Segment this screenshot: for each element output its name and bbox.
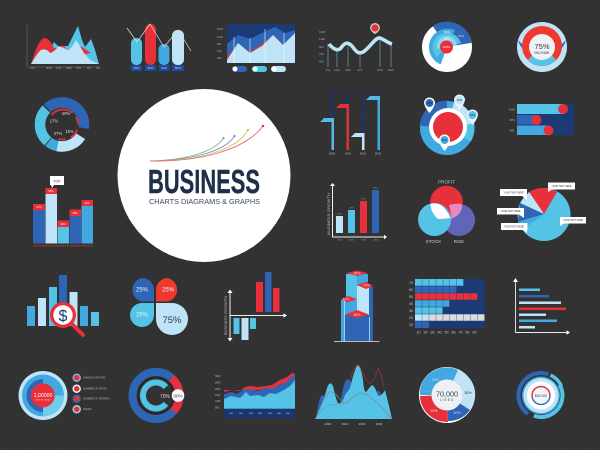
chart: concentric ring dial: $50,000	[535, 394, 547, 398]
chart: 3D stepped columns: 90%	[353, 272, 361, 276]
chart: bars with TOP callout: 95%	[48, 190, 54, 193]
chart: heatmap grid: 40	[409, 302, 413, 306]
chart: layered area chart: TUE	[56, 67, 61, 70]
chart: wavy line chart: OCT	[357, 68, 363, 72]
chart: horizontal bars by country: IND	[509, 128, 515, 132]
chart: visitors donut with legend	[18, 371, 110, 420]
chart: heatmap grid: 30	[430, 330, 434, 334]
chart: 70/30 donut: 30%	[173, 394, 184, 400]
chart: horizontal bars by country: JPN	[509, 118, 515, 122]
chart: business growth bars: 30%	[337, 214, 342, 216]
chart: layered area chart: THU	[76, 67, 81, 70]
chart: stacked area chart with footer: 2005	[268, 413, 273, 415]
chart: stacked area chart with footer: 2007	[286, 413, 291, 415]
chart: pie with callouts	[497, 182, 586, 241]
chart: heatmap grid: 60	[452, 330, 456, 334]
chart: heatmap grid: 70	[409, 281, 413, 285]
chart: mountain area chart: 2030	[376, 422, 383, 426]
chart: rounded bars with line: 40%	[133, 66, 140, 70]
chart: business growth bars: 2013	[361, 240, 367, 242]
chart: radial stepped pie: 75%	[443, 37, 450, 41]
chart: flag bars: 2020	[360, 152, 367, 156]
legend: NUMBER OF ORDERS	[83, 398, 110, 400]
chart: segmented donut left: 27%	[54, 131, 62, 136]
chart: ring with location pins: 20%	[457, 98, 463, 102]
chart: heatmap grid: 20	[424, 330, 428, 334]
chart: area chart with legend: 500	[217, 56, 222, 60]
chart: bars with magnifier icon	[27, 275, 99, 335]
chart: concentric ring dial	[510, 364, 572, 427]
chart: rounded bars with line: 32%	[161, 66, 167, 70]
chart: wavy line chart: SEP	[345, 68, 351, 72]
legend: UNIQUE VISITORS	[83, 376, 105, 380]
chart: 70,000 likes donut: 70,000	[436, 390, 458, 398]
chart: stacked area chart with footer: 3000	[215, 375, 221, 378]
chart: radial stepped pie: 32%	[458, 34, 464, 38]
chart: business growth bars	[326, 183, 387, 242]
chart: ring with location pins: 40%	[442, 138, 448, 142]
chart: rounded bars with line	[127, 24, 191, 71]
chart: wavy line chart: NOV	[377, 68, 383, 72]
chart: business growth bars: 90%	[373, 188, 378, 190]
chart: wavy line chart	[319, 23, 394, 72]
chart: stacked area chart with footer: 2001	[229, 413, 234, 415]
chart: positive and negative bars	[224, 272, 287, 342]
chart: wavy line chart: 700	[319, 52, 324, 56]
chart: bars with TOP callout: TOP	[53, 180, 61, 184]
chart: stacked area chart with footer: 2500	[215, 382, 221, 384]
chart: venn diagram	[418, 180, 475, 244]
chart: heatmap grid: 10	[416, 330, 420, 334]
chart: mountain area chart	[315, 365, 392, 426]
chart: ring with location pins: 15%	[470, 113, 476, 117]
chart: income gauge: INCOME	[534, 51, 550, 55]
chart: horizontal bars by country	[509, 104, 574, 136]
chart: heatmap grid: 90	[472, 330, 476, 334]
chart: bars with TOP callout: 16%	[60, 223, 66, 226]
chart: stacked area chart with footer: 2000	[215, 388, 221, 391]
chart: business growth bars: BUSINESS GROWTH	[326, 193, 331, 235]
chart: area chart with legend	[217, 24, 295, 72]
chart: 3D stepped columns	[334, 270, 380, 342]
chart: area chart with legend: 1100	[217, 35, 223, 39]
chart: clover percentages: 25%	[136, 312, 149, 318]
chart: wavy line chart: 1100	[319, 37, 325, 41]
chart: pie with callouts: YOUR TEXT HERE	[503, 192, 524, 194]
chart: 70,000 likes donut: 25%	[432, 378, 440, 382]
chart: area chart with legend: 700	[217, 49, 222, 53]
chart: visitors donut with legend: VISITOR TODAY	[35, 398, 51, 402]
chart: 3D stepped columns: 70%	[363, 284, 370, 288]
chart: 70/30 donut: 70%	[160, 394, 171, 400]
chart: bars with TOP callout: 44%	[84, 202, 90, 205]
chart: 70/30 donut	[123, 362, 189, 429]
chart: wavy line chart: DEC	[388, 68, 394, 72]
chart: visitors donut with legend: 1,00000	[34, 393, 52, 399]
chart: heatmap grid: 10	[409, 323, 413, 327]
chart: pie with callouts: YOUR TEXT HERE	[551, 186, 572, 188]
chart: stacked area chart with footer: 2006	[277, 413, 282, 415]
chart: heatmap grid: 30	[409, 309, 413, 313]
chart: layered area chart: MON	[46, 67, 52, 70]
chart: heatmap grid: 50	[444, 330, 448, 334]
chart: radial stepped pie	[422, 22, 472, 72]
chart: stacked area chart with footer: 2002	[239, 413, 244, 415]
chart: 70,000 likes donut: 30%	[464, 391, 472, 395]
chart: rounded bars with line: 80%	[175, 66, 181, 70]
chart: business growth bars: 2014	[374, 240, 379, 242]
chart: bars with TOP callout: 30%	[72, 212, 78, 215]
chart: mountain area chart: 2000	[325, 422, 332, 426]
chart: wavy line chart: 500	[319, 60, 324, 64]
legend	[73, 374, 110, 413]
legend: NUMBER OF VISITS	[83, 388, 107, 390]
chart: pie with callouts: YOUR TEXT HERE	[563, 220, 584, 222]
chart: horizontal line bars with axes	[513, 278, 570, 335]
chart: stacked area chart with footer: 500	[215, 406, 220, 410]
chart: heatmap grid: 20	[409, 316, 413, 320]
heading: BUSINESS	[148, 164, 260, 201]
chart: business growth bars: 2011	[337, 240, 343, 242]
chart: stacked area chart with footer	[215, 373, 295, 418]
chart: positive and negative bars: BUSINESS GROWTH	[224, 296, 228, 335]
chart: rounded bars with line: 90%	[147, 66, 154, 70]
chart: income gauge	[517, 22, 567, 72]
chart: wavy line chart: JUL	[326, 68, 331, 72]
chart: wavy line chart: 900	[319, 45, 324, 49]
chart: layered area chart: FRI	[87, 67, 91, 70]
chart: stacked area chart with footer: 1500	[215, 394, 221, 397]
chart: 70,000 likes donut: 20%	[453, 411, 461, 415]
chart: business growth bars: 40%	[349, 208, 354, 210]
chart: wavy line chart: 1300	[319, 30, 326, 34]
chart: segmented donut left	[31, 93, 93, 156]
chart: area chart with legend: 900	[217, 42, 222, 46]
chart: radial stepped pie: 100%	[443, 45, 451, 49]
chart: stacked area chart with footer: 2004	[258, 413, 263, 415]
chart: segmented donut left: 17%	[50, 118, 58, 124]
chart: stacked area chart with footer: 2003	[249, 413, 254, 415]
central title badge	[118, 89, 290, 262]
chart: flag bars	[320, 92, 382, 156]
chart: clover percentages	[130, 278, 188, 335]
chart: layered area chart: JAN	[30, 67, 35, 70]
icon: growth swoosh arrows	[150, 125, 264, 161]
chart: venn diagram: RISK	[454, 239, 465, 244]
chart: layered area chart: WED	[66, 67, 72, 70]
chart: flag bars: 2000	[329, 152, 336, 156]
chart: radial stepped pie: 50%	[444, 30, 450, 34]
chart: segmented donut left: 40%	[62, 111, 70, 116]
chart: pie with callouts: YOUR TEXT HERE	[500, 211, 521, 213]
legend: PAGES	[83, 408, 92, 411]
chart: bars with TOP callout: 27%	[36, 206, 42, 209]
chart: heatmap grid: 60	[409, 288, 413, 292]
chart: mountain area chart: 2020	[359, 422, 366, 426]
icon: magnifier: $	[59, 308, 68, 325]
chart: bars with TOP callout	[33, 176, 93, 246]
chart: mountain area chart: 2010	[342, 422, 349, 426]
chart: heatmap grid: 80	[466, 330, 470, 334]
chart: pie with callouts: YOUR TEXT HERE	[504, 226, 525, 228]
chart: heatmap grid: 50	[409, 295, 413, 299]
chart: segmented donut left: 15%	[65, 129, 74, 134]
chart: 70,000 likes donut: 25%	[430, 409, 438, 413]
chart: venn diagram: STOCK	[426, 239, 442, 244]
chart: clover percentages: 75%	[162, 315, 182, 326]
chart: business growth bars: 70%	[361, 198, 366, 200]
subtitle: CHARTS DIAGRAMS & GRAPHS	[149, 197, 260, 206]
chart: 3D stepped columns: 40%	[342, 298, 350, 302]
chart: flag bars: 2030	[375, 152, 382, 156]
chart: wavy line chart: AUG	[334, 68, 340, 72]
chart: 70,000 likes donut: LIKES	[440, 398, 454, 402]
chart: clover percentages: 25%	[162, 288, 175, 294]
chart: horizontal bars by country: USA	[509, 108, 515, 112]
chart: venn diagram: PROFIT	[438, 180, 455, 184]
chart: heatmap grid	[409, 279, 484, 334]
chart: stacked area chart with footer: 1000	[215, 400, 221, 403]
chart: 3D stepped columns: 25%	[353, 313, 361, 317]
chart: flag bars: 2010	[345, 152, 352, 156]
chart: ring with location pins	[419, 94, 478, 156]
chart: heatmap grid: 70	[458, 330, 462, 334]
chart: layered area chart	[27, 25, 101, 70]
chart: 70,000 likes donut	[419, 367, 475, 423]
chart: area chart with legend: 1300	[217, 27, 224, 31]
chart: business growth bars: 2012	[349, 240, 355, 242]
chart: ring with location pins: 25%	[427, 101, 433, 105]
chart: heatmap grid: 40	[438, 330, 442, 334]
chart: income gauge: 75%	[534, 42, 550, 51]
chart: clover percentages: 25%	[136, 288, 149, 294]
chart: layered area chart: SAT	[96, 67, 101, 70]
